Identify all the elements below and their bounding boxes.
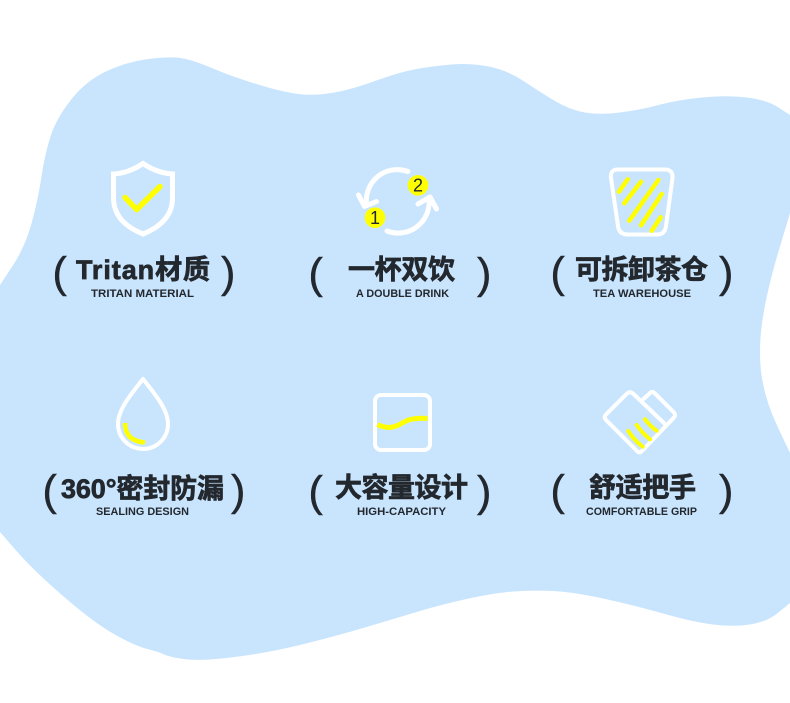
- heading: tea warehouse: 可拆卸茶仓: [575, 255, 708, 285]
- icon: cycle arrows with numbers: 2: [413, 176, 423, 196]
- heading: Tritan material: [52, 249, 235, 297]
- heading: comfortable grip: [550, 467, 733, 515]
- subtitle: high capacity: HIGH-CAPACITY: [357, 506, 447, 518]
- subtitle: sealing design: SEALING DESIGN: [96, 506, 189, 518]
- icon: shield with check: [114, 164, 172, 234]
- feature: Tritan material: [52, 164, 235, 300]
- feature: high capacity: [308, 395, 491, 518]
- heading: sealing design: [42, 467, 245, 515]
- heading: comfortable grip: (: [550, 467, 566, 515]
- heading: double drink: 一杯双饮: [348, 255, 455, 285]
- heading: high capacity: [308, 468, 491, 516]
- icon: grip handle: [605, 392, 675, 452]
- feature: sealing design: [42, 379, 245, 518]
- subtitle: tea warehouse: TEA WAREHOUSE: [593, 288, 691, 300]
- heading: sealing design: ): [231, 467, 245, 515]
- subtitle: Tritan material: TRITAN MATERIAL: [91, 288, 194, 300]
- heading: Tritan material: ): [221, 249, 235, 297]
- icon: cycle arrows with numbers: 1: [370, 208, 380, 228]
- heading: double drink: (: [308, 250, 324, 298]
- icon: square with water line: [375, 395, 430, 450]
- heading: Tritan material: (: [52, 249, 68, 297]
- heading: high capacity: (: [308, 468, 324, 516]
- feature: tea warehouse: [550, 170, 733, 300]
- heading: double drink: ): [477, 250, 491, 298]
- feature: comfortable grip: [550, 392, 733, 518]
- subtitle: double drink: A DOUBLE DRINK: [356, 288, 449, 300]
- icon: water drop: [118, 379, 168, 449]
- heading: comfortable grip: ): [719, 467, 733, 515]
- heading: double drink: [308, 250, 491, 298]
- heading: comfortable grip: 舒适把手: [589, 473, 696, 503]
- heading: sealing design: (: [42, 467, 58, 515]
- heading: sealing design: 360°密封防漏: [61, 473, 224, 504]
- heading: tea warehouse: ): [719, 249, 733, 297]
- subtitle: comfortable grip: COMFORTABLE GRIP: [586, 506, 697, 518]
- icon: cup with stripes: [611, 170, 673, 234]
- heading: high capacity: ): [477, 468, 491, 516]
- heading: high capacity: 大容量设计: [335, 473, 468, 503]
- feature: a double drink: [308, 170, 491, 300]
- heading: tea warehouse: (: [550, 249, 566, 297]
- heading: Tritan material: Tritan材质: [76, 255, 210, 285]
- heading: tea warehouse: [550, 249, 733, 297]
- icon: cycle arrows with numbers: [358, 170, 436, 233]
